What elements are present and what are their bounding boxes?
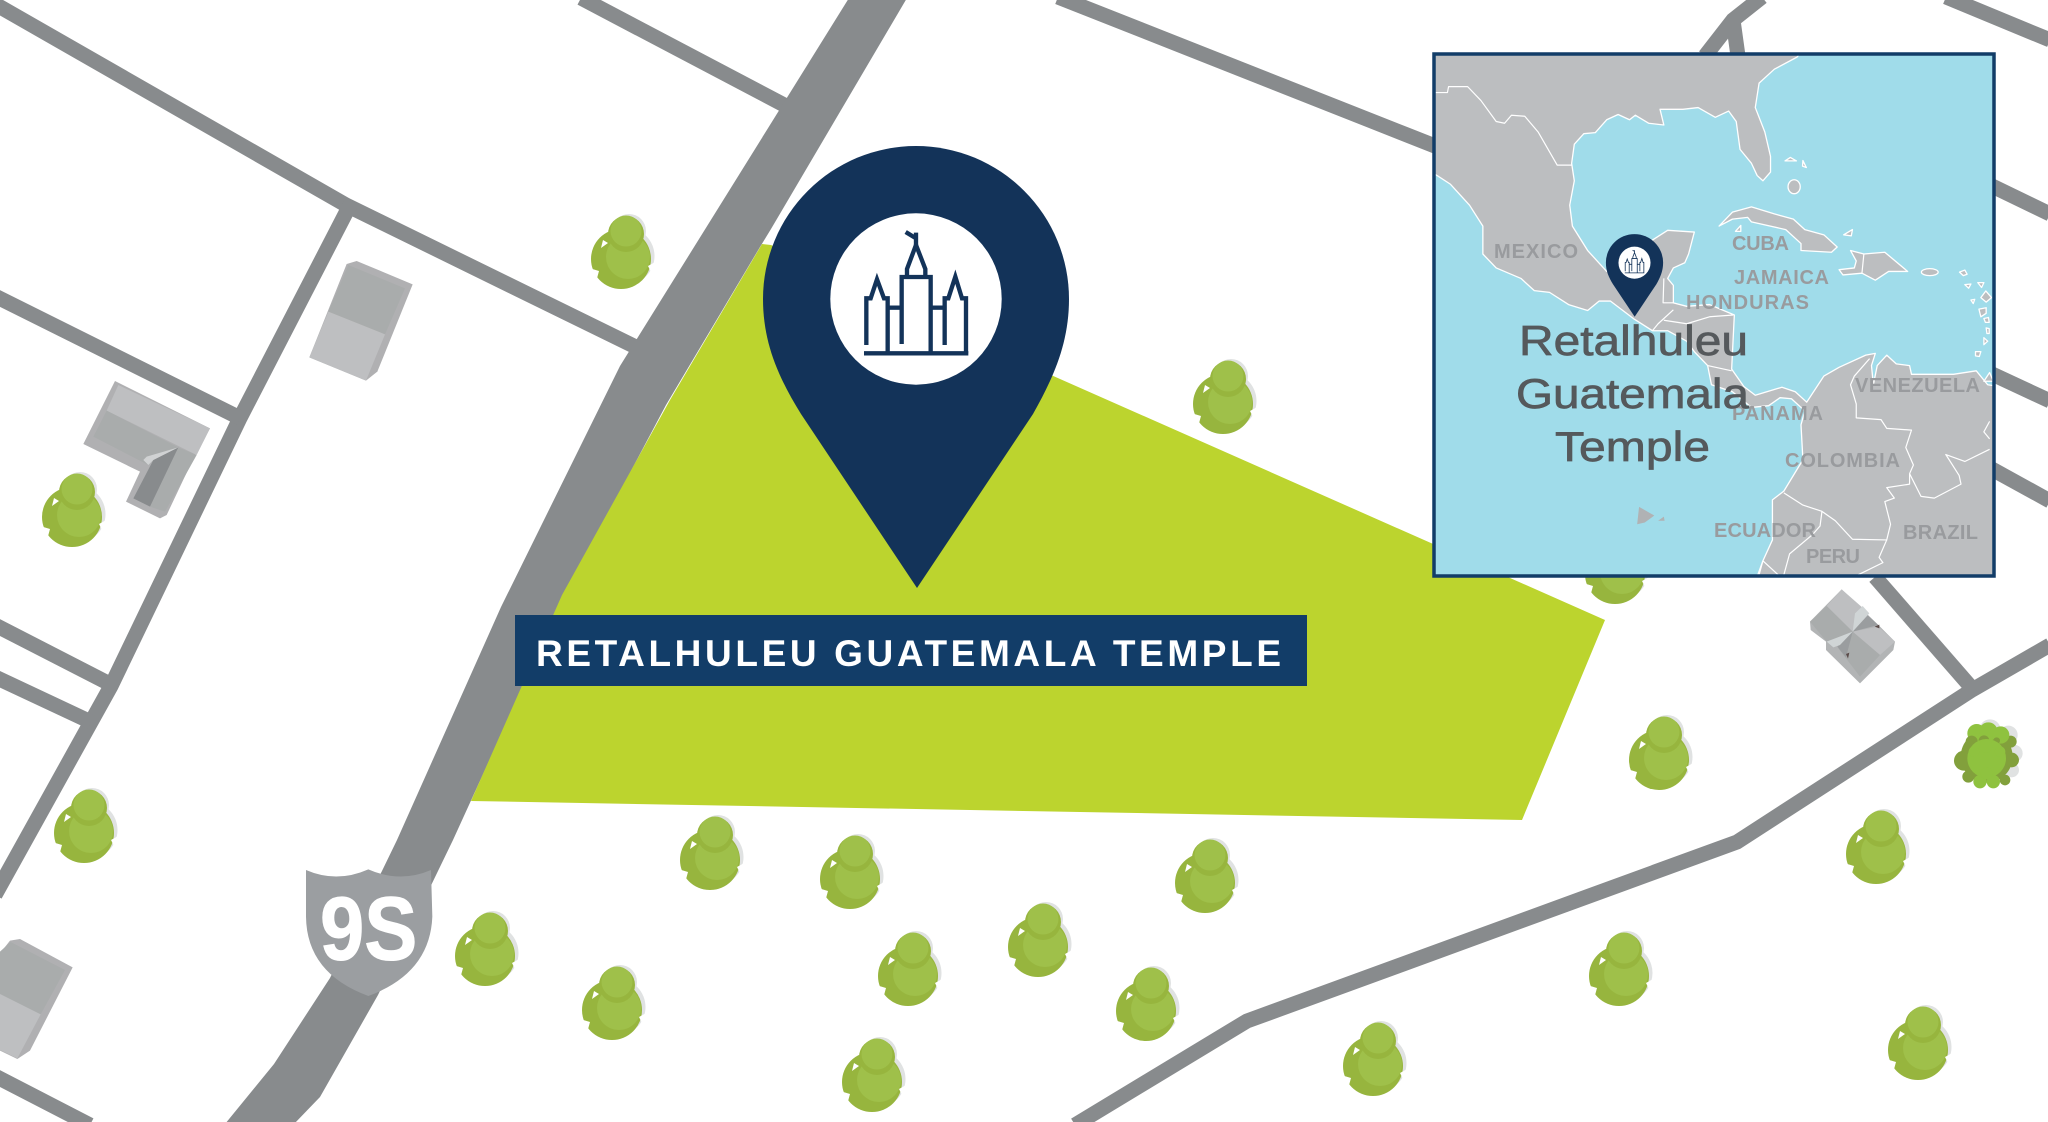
inset temple name: Guatemala — [1516, 370, 1750, 417]
inset temple name — [1516, 317, 1750, 470]
temple name banner — [515, 615, 1307, 686]
country labels: JAMAICA — [1734, 267, 1829, 289]
country labels: PERU — [1806, 546, 1860, 568]
house: right with cross roof — [1810, 589, 1895, 683]
land masses — [1428, 52, 1999, 582]
country labels: MEXICO — [1494, 241, 1578, 263]
inset map panel — [1428, 52, 1999, 582]
house: bottom-left edge — [0, 939, 73, 1059]
main location pin with temple icon — [763, 146, 1069, 588]
country labels: ECUADOR — [1714, 520, 1817, 542]
country labels: PANAMA — [1732, 403, 1823, 425]
Galapagos islands — [1637, 507, 1665, 524]
house: left with wing — [83, 381, 210, 518]
inset location pin — [1606, 234, 1663, 317]
temple name banner: RETALHULEU GUATEMALA TEMPLE — [536, 633, 1281, 674]
house: top centre-left — [309, 261, 413, 381]
inset temple name: Temple — [1555, 423, 1710, 470]
trees — [40, 214, 1954, 1112]
highway shield: 9S: 9S — [320, 879, 417, 979]
country labels — [1494, 233, 1980, 568]
main highway — [225, 0, 907, 1122]
highway shield: 9S — [306, 869, 432, 996]
country labels: VENEZUELA — [1855, 375, 1980, 397]
icon: round bush — [1954, 719, 2023, 788]
inset temple name: Retalhuleu — [1519, 317, 1748, 364]
country labels: BRAZIL — [1903, 522, 1978, 544]
temple site area — [471, 244, 1605, 820]
country labels: CUBA — [1732, 233, 1789, 255]
country labels: HONDURAS — [1686, 292, 1809, 314]
country borders — [1431, 87, 1990, 575]
country labels: COLOMBIA — [1785, 450, 1900, 472]
